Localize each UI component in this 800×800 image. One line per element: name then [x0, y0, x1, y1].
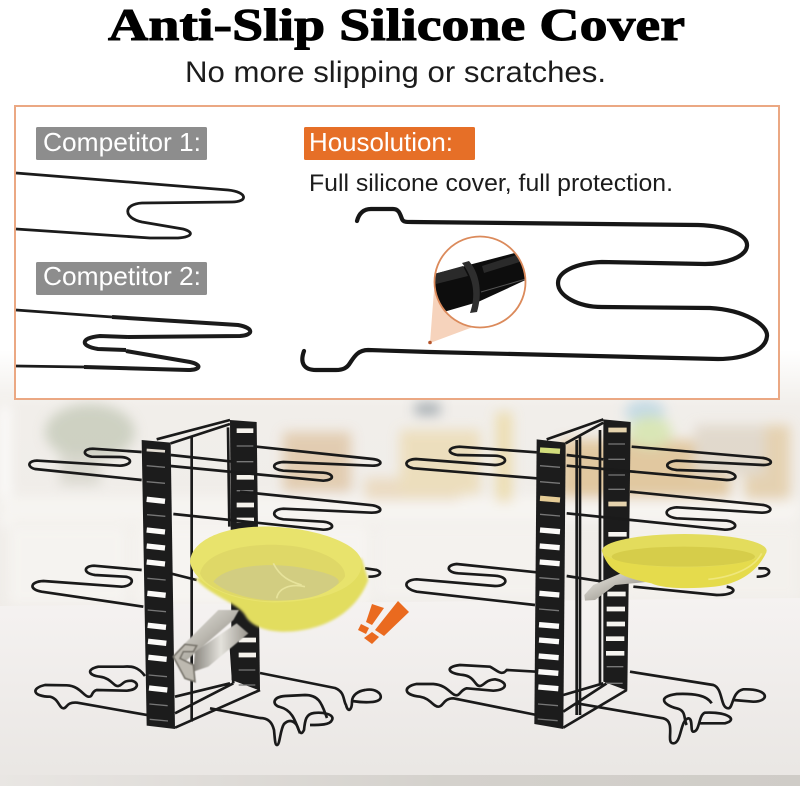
pan body right [602, 534, 767, 588]
panel: comparison [15, 106, 779, 399]
label: competitor 2: Competitor 2: [43, 261, 201, 291]
title: Anti-Slip Silicone Cover [108, 0, 685, 50]
text: full silicone cover: Full silicone cover, full protection. [309, 170, 673, 197]
pan body left [190, 527, 368, 632]
icon: orange warning marks [358, 601, 409, 644]
pan: level, resting [584, 534, 767, 601]
rack: left, pan slipping [29, 420, 381, 745]
rack frame right [534, 419, 631, 729]
label: housolution: Housolution: [309, 127, 453, 157]
wire: competitor 1 [16, 173, 244, 238]
callout: silicone zoom [428, 236, 530, 344]
rack wires left [29, 447, 381, 745]
subtitle: No more slipping or scratches. [185, 56, 606, 89]
kitchen background photo [0, 350, 800, 800]
pan handle right [584, 572, 650, 601]
wire: housolution [302, 209, 767, 370]
rack wires right [406, 447, 771, 743]
rack frame left [142, 420, 260, 729]
label: competitor 1: Competitor 1: [43, 127, 201, 157]
pan: tilted, slipping [173, 527, 368, 682]
rack: right, pan secure [406, 419, 771, 743]
wire: competitor 2 [16, 310, 250, 370]
pan handle left [173, 610, 248, 682]
